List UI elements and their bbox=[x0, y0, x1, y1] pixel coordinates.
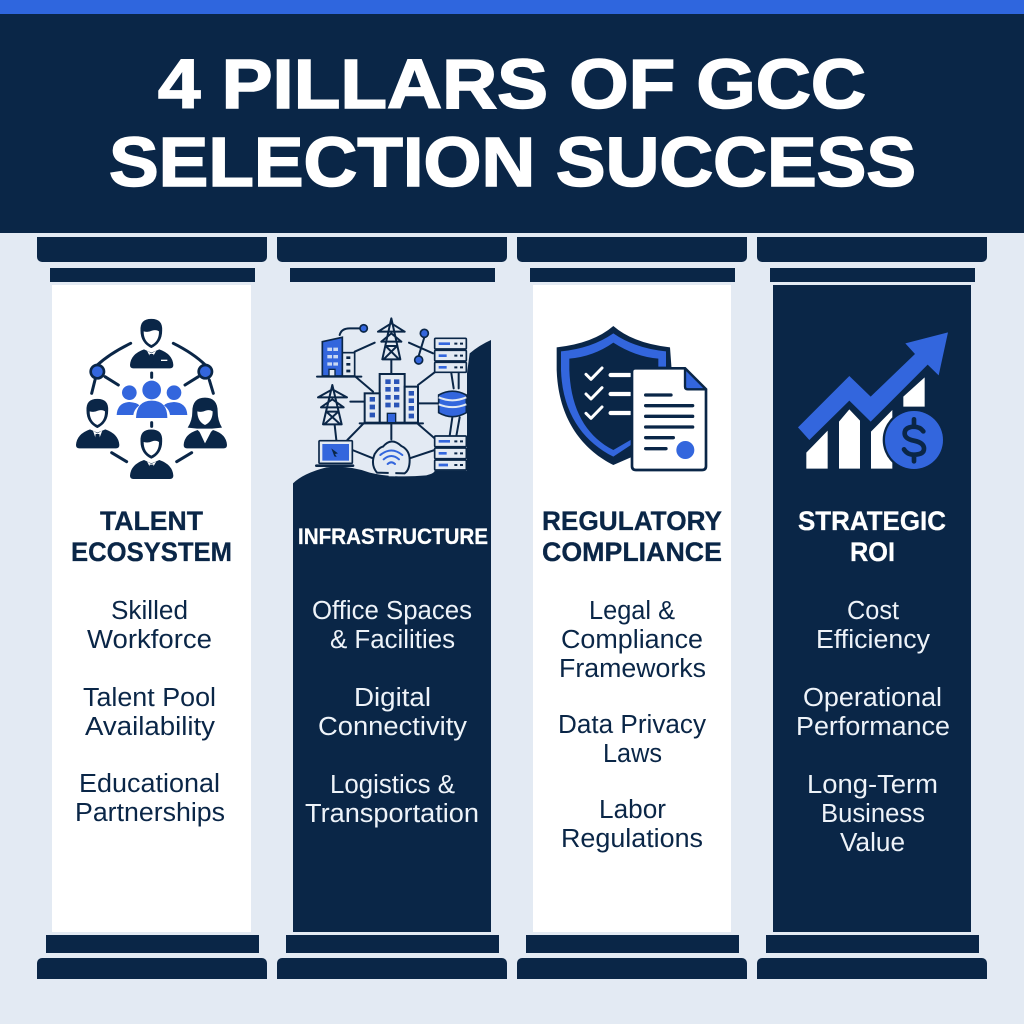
list: regulatory items: Frameworks bbox=[559, 655, 706, 683]
list: regulatory items: Data Privacy bbox=[558, 711, 706, 739]
icon: talent network bbox=[76, 318, 227, 479]
title: 4 PILLARS OF GCC bbox=[158, 45, 866, 123]
pylon top bbox=[378, 318, 405, 359]
list: strategic items: Performance bbox=[796, 713, 950, 741]
list: talent items: Talent Pool bbox=[83, 684, 216, 712]
server racks bbox=[435, 338, 466, 470]
connector lines bbox=[335, 328, 460, 458]
list: regulatory items bbox=[558, 597, 706, 853]
list: talent items bbox=[75, 597, 225, 827]
person: bottom bbox=[130, 429, 173, 479]
list: infrastructure items: Digital bbox=[354, 684, 431, 712]
icon: growth chart with dollar bbox=[798, 332, 948, 471]
list: infrastructure items: Logistics & bbox=[330, 771, 455, 799]
shaft with curved light cut-out bbox=[293, 340, 491, 932]
panel: strategic ROI pillar bbox=[757, 237, 987, 979]
list: strategic items: Operational bbox=[803, 684, 942, 712]
list: regulatory items: Compliance bbox=[561, 626, 703, 654]
list: talent items: Availability bbox=[85, 713, 215, 741]
person: left bbox=[76, 398, 119, 448]
list: infrastructure items: Office Spaces bbox=[312, 597, 472, 625]
list: strategic items bbox=[796, 597, 950, 857]
list: regulatory items: Regulations bbox=[561, 825, 703, 853]
list: talent items: Partnerships bbox=[75, 799, 225, 827]
heading: regulatory compliance: REGULATORY bbox=[542, 506, 722, 536]
list: infrastructure items: Connectivity bbox=[318, 713, 467, 741]
heading: talent ecosystem: ECOSYSTEM bbox=[71, 537, 232, 567]
pylon left bbox=[318, 385, 347, 424]
heading: talent ecosystem: TALENT bbox=[100, 506, 203, 536]
title bbox=[109, 45, 916, 201]
heading: strategic ROI bbox=[798, 506, 946, 567]
heading: regulatory compliance bbox=[542, 506, 722, 567]
wifi cloud bbox=[373, 441, 410, 476]
heading: talent ecosystem bbox=[71, 506, 232, 567]
heading: strategic ROI: ROI bbox=[850, 537, 895, 567]
icon: infrastructure network bbox=[316, 318, 466, 476]
person: right bbox=[184, 398, 227, 448]
list: regulatory items: Legal & bbox=[589, 597, 675, 625]
heading: strategic ROI: STRATEGIC bbox=[798, 506, 946, 536]
list: talent items: Workforce bbox=[87, 626, 212, 654]
blue office tower bbox=[317, 337, 361, 377]
person: top bbox=[130, 318, 173, 368]
list: infrastructure items: Transportation bbox=[305, 800, 479, 828]
database bbox=[439, 391, 466, 417]
laptop bbox=[316, 441, 353, 466]
panel: regulatory compliance pillar bbox=[517, 237, 747, 979]
icon: shield and document bbox=[557, 326, 706, 470]
list: talent items: Skilled bbox=[111, 597, 188, 625]
list: infrastructure items bbox=[305, 597, 479, 828]
list: strategic items: Efficiency bbox=[816, 626, 930, 654]
list: strategic items: Value bbox=[840, 829, 905, 857]
list: infrastructure items: & Facilities bbox=[330, 626, 455, 654]
list: strategic items: Long-Term bbox=[807, 771, 938, 799]
heading: regulatory compliance: COMPLIANCE bbox=[542, 537, 722, 567]
heading: infrastructure: INFRASTRUCTURE bbox=[298, 524, 488, 549]
list: strategic items: Business bbox=[821, 800, 925, 828]
header band bbox=[0, 0, 1024, 233]
list: talent items: Educational bbox=[79, 770, 220, 798]
central building bbox=[360, 374, 423, 423]
list: strategic items: Cost bbox=[847, 597, 899, 625]
list: regulatory items: Labor bbox=[599, 796, 667, 824]
panel: talent ecosystem pillar bbox=[37, 237, 267, 979]
title: SELECTION SUCCESS bbox=[109, 123, 916, 201]
list: regulatory items: Laws bbox=[603, 740, 662, 768]
panel: infrastructure pillar bbox=[277, 237, 507, 979]
